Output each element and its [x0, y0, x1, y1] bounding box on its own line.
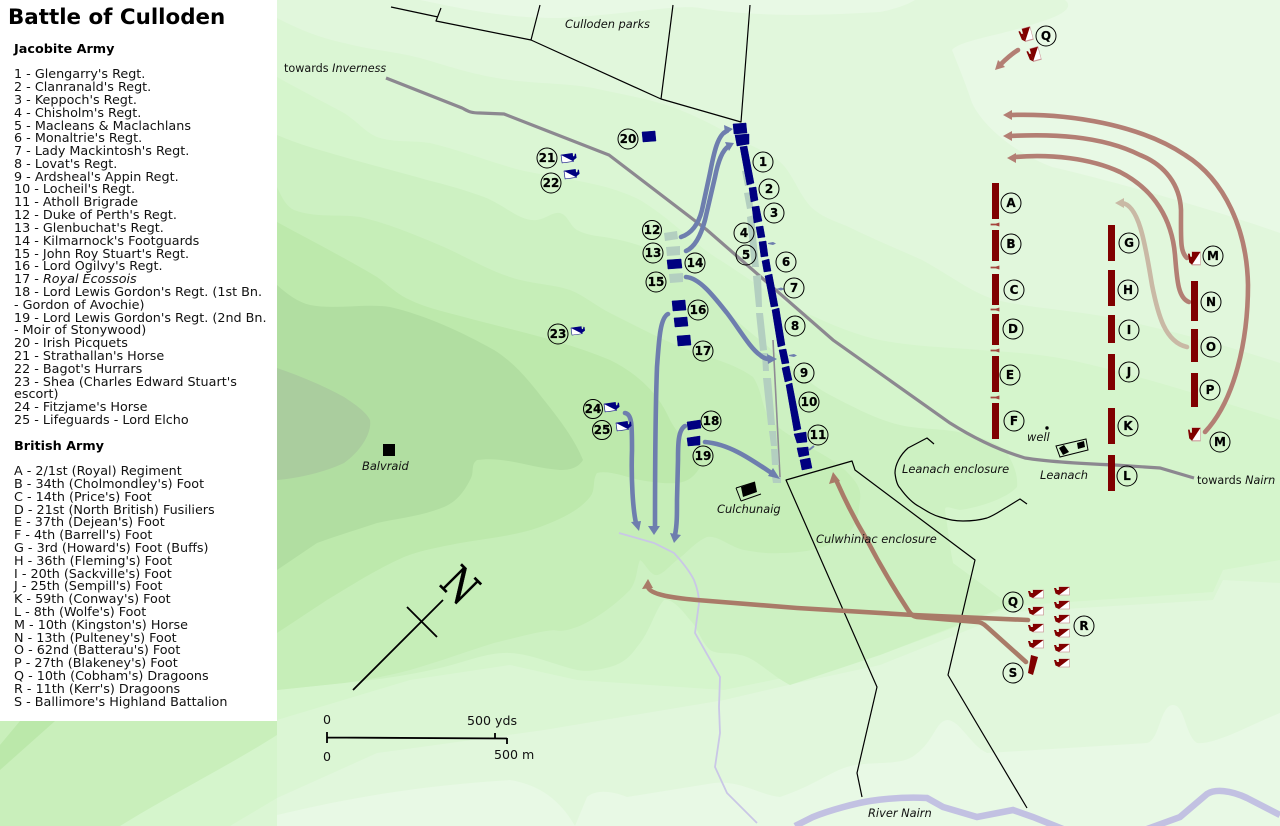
- Jacobite Army list: 15 - John Roy Stuart's Regt.: [14, 247, 189, 262]
- Jacobite Army list: 17 - Royal Écossois: [14, 271, 137, 287]
- unit number markers: 17: [695, 344, 711, 358]
- unit number markers: B: [1006, 237, 1016, 251]
- Jacobite Army list: 7 - Lady Mackintosh's Regt.: [14, 144, 189, 159]
- side road: [773, 340, 780, 477]
- unit number markers: 23: [550, 327, 566, 341]
- scale bar: [323, 712, 534, 764]
- unit number markers: Q: [1041, 29, 1051, 43]
- map labels: towards Nairn: [1197, 474, 1275, 487]
- unit number markers: 11: [810, 428, 826, 442]
- British Army list: I - 20th (Sackville's) Foot: [14, 567, 172, 582]
- Jacobite Army list: 10 - Locheil's Regt.: [14, 182, 135, 197]
- north arrow: [353, 557, 488, 690]
- British Army list: C - 14th (Price's) Foot: [14, 490, 152, 505]
- Jacobite Army list: escort): [14, 387, 59, 402]
- unit number markers: I: [1127, 323, 1131, 337]
- north arrow: N: [430, 557, 488, 615]
- unit number markers: R: [1079, 619, 1089, 633]
- unit number markers: O: [1206, 340, 1216, 354]
- map labels: River Nairn: [868, 806, 932, 820]
- Jacobite Army list: 1 - Glengarry's Regt.: [14, 67, 145, 82]
- unit number markers: 21: [539, 151, 555, 165]
- British Army list: E - 37th (Dejean's) Foot: [14, 515, 165, 530]
- unit number markers: K: [1123, 419, 1133, 433]
- map labels: Culchunaig: [717, 502, 781, 516]
- British Army list: H - 36th (Fleming's) Foot: [14, 554, 172, 569]
- Jacobite Army list: 20 - Irish Picquets: [14, 336, 128, 351]
- unit number markers: E: [1006, 368, 1014, 382]
- unit number markers: 16: [690, 303, 706, 317]
- Jacobite Army list: 5 - Macleans & Maclachlans: [14, 119, 191, 134]
- unit number markers: P: [1206, 383, 1215, 397]
- Jacobite Army list: 9 - Ardsheal's Appin Regt.: [14, 170, 179, 185]
- unit number markers: 13: [645, 246, 661, 260]
- British Army list: B - 34th (Cholmondley's) Foot: [14, 477, 204, 492]
- unit number markers: 5: [742, 248, 750, 262]
- unit number markers: 9: [800, 366, 808, 380]
- unit number markers: 18: [703, 414, 719, 428]
- Jacobite cavalry: [561, 153, 632, 431]
- British Army list: R - 11th (Kerr's) Dragoons: [14, 682, 181, 697]
- map labels: [284, 17, 1275, 820]
- Jacobite Army list: 21 - Strathallan's Horse: [14, 349, 164, 364]
- legend panel: [0, 0, 277, 721]
- Jacobite Army list: 12 - Duke of Perth's Regt.: [14, 208, 177, 223]
- title: Battle of Culloden: [8, 5, 225, 30]
- scale bar: 0: [323, 712, 331, 727]
- unit number markers: 14: [687, 256, 703, 270]
- buildings: [383, 426, 1088, 501]
- unit number markers: S: [1009, 666, 1017, 680]
- map labels: towards Inverness: [284, 62, 386, 75]
- British Army list: L - 8th (Wolfe's) Foot: [14, 605, 146, 620]
- unit number markers: 15: [648, 275, 664, 289]
- British Army list: A - 2/1st (Royal) Regiment: [14, 464, 182, 479]
- road to Nairn: [386, 78, 1194, 478]
- Jacobite Army list: 14 - Kilmarnock's Footguards: [14, 234, 200, 249]
- Jacobite movement arrows: [625, 125, 814, 543]
- British Army list: O - 62nd (Batterau's) Foot: [14, 643, 180, 658]
- Jacobite Army list: 3 - Keppoch's Regt.: [14, 93, 137, 108]
- British infantry: [992, 183, 1198, 675]
- British Army list: D - 21st (North British) Fusiliers: [14, 503, 215, 518]
- Jacobite front line: [642, 123, 812, 470]
- British Army list: N - 13th (Pulteney's) Foot: [14, 631, 177, 646]
- river tributary: [619, 533, 757, 823]
- unit number markers: 19: [695, 449, 711, 463]
- unit number markers: G: [1124, 236, 1134, 250]
- Jacobite Army list: 16 - Lord Ogilvy's Regt.: [14, 259, 163, 274]
- unit number markers: [537, 26, 1230, 683]
- unit number markers: M: [1207, 249, 1219, 263]
- map labels: Balvraid: [362, 459, 410, 473]
- map labels: Leanach enclosure: [902, 462, 1009, 476]
- British Army list: M - 10th (Kingston's) Horse: [14, 618, 188, 633]
- map labels: Leanach: [1040, 468, 1088, 482]
- British Army list: British Army: [14, 439, 105, 454]
- unit number markers: 7: [790, 281, 798, 295]
- unit number markers: 12: [644, 223, 660, 237]
- British Army list: K - 59th (Conway's) Foot: [14, 592, 171, 607]
- Jacobite Army list: 13 - Glenbuchat's Regt.: [14, 221, 164, 236]
- Jacobite Army list: - Moir of Stonywood): [14, 323, 146, 338]
- map labels: Culloden parks: [565, 17, 650, 31]
- Jacobite Army list: 11 - Atholl Brigrade: [14, 195, 138, 210]
- British Army list: [13, 439, 227, 710]
- British Army list: Q - 10th (Cobham's) Dragoons: [14, 669, 209, 684]
- scale bar: 0: [323, 749, 331, 764]
- Jacobite Army list: - Gordon of Avochie): [14, 298, 144, 313]
- British movement arrows: [642, 50, 1248, 662]
- Jacobite Army list: 8 - Lovat's Regt.: [14, 157, 117, 172]
- unit number markers: L: [1123, 469, 1131, 483]
- British dragoons: [1018, 27, 1200, 667]
- Jacobite Army list: 22 - Bagot's Hurrars: [14, 362, 143, 377]
- River Nairn: [795, 791, 1280, 826]
- Jacobite Army list: 2 - Clanranald's Regt.: [14, 80, 151, 95]
- British Army list: F - 4th (Barrell's) Foot: [14, 528, 152, 543]
- unit number markers: Q: [1008, 595, 1018, 609]
- Jacobite Army list: 18 - Lord Lewis Gordon's Regt. (1st Bn.: [14, 285, 262, 300]
- unit number markers: A: [1006, 196, 1016, 210]
- Jacobite Army list: 24 - Fitzjame's Horse: [14, 400, 148, 415]
- Jacobite Army list: Jacobite Army: [13, 42, 115, 57]
- unit number markers: D: [1008, 322, 1018, 336]
- British Army list: J - 25th (Sempill's) Foot: [13, 579, 163, 594]
- British Army list: G - 3rd (Howard's) Foot (Buffs): [14, 541, 208, 556]
- unit number markers: N: [1206, 295, 1216, 309]
- Jacobite first positions: [664, 170, 781, 483]
- Jacobite Army list: 6 - Monaltrie's Regt.: [14, 131, 142, 146]
- British Army list: S - Ballimore's Highland Battalion: [14, 695, 227, 710]
- scale bar: 500 yds: [467, 713, 517, 728]
- unit number markers: 4: [740, 226, 748, 240]
- unit number markers: 10: [801, 395, 817, 409]
- unit number markers: 6: [782, 255, 790, 269]
- map labels: Culwhiniac enclosure: [816, 532, 937, 546]
- British Army list: P - 27th (Blakeney's) Foot: [14, 656, 178, 671]
- unit number markers: 2: [765, 182, 773, 196]
- unit number markers: 22: [543, 176, 559, 190]
- unit number markers: 25: [594, 423, 610, 437]
- unit number markers: 3: [770, 206, 778, 220]
- unit number markers: 8: [791, 319, 799, 333]
- unit number markers: H: [1123, 283, 1133, 297]
- unit number markers: C: [1010, 283, 1019, 297]
- unit number markers: 1: [759, 155, 767, 169]
- unit number markers: J: [1126, 365, 1131, 379]
- Jacobite Army list: 19 - Lord Lewis Gordon's Regt. (2nd Bn.: [14, 311, 267, 326]
- enclosure walls: [391, 5, 1027, 808]
- unit number markers: 20: [620, 132, 636, 146]
- scale bar: 500 m: [494, 747, 534, 762]
- Jacobite Army list: 25 - Lifeguards - Lord Elcho: [14, 413, 189, 428]
- unit number markers: F: [1010, 414, 1018, 428]
- Jacobite Army list: 4 - Chisholm's Regt.: [14, 106, 141, 121]
- unit number markers: 24: [585, 402, 601, 416]
- unit number markers: M: [1214, 435, 1226, 449]
- map labels: well: [1027, 430, 1050, 444]
- Jacobite Army list: 23 - Shea (Charles Edward Stuart's: [14, 375, 237, 390]
- Jacobite Army list: [13, 42, 267, 428]
